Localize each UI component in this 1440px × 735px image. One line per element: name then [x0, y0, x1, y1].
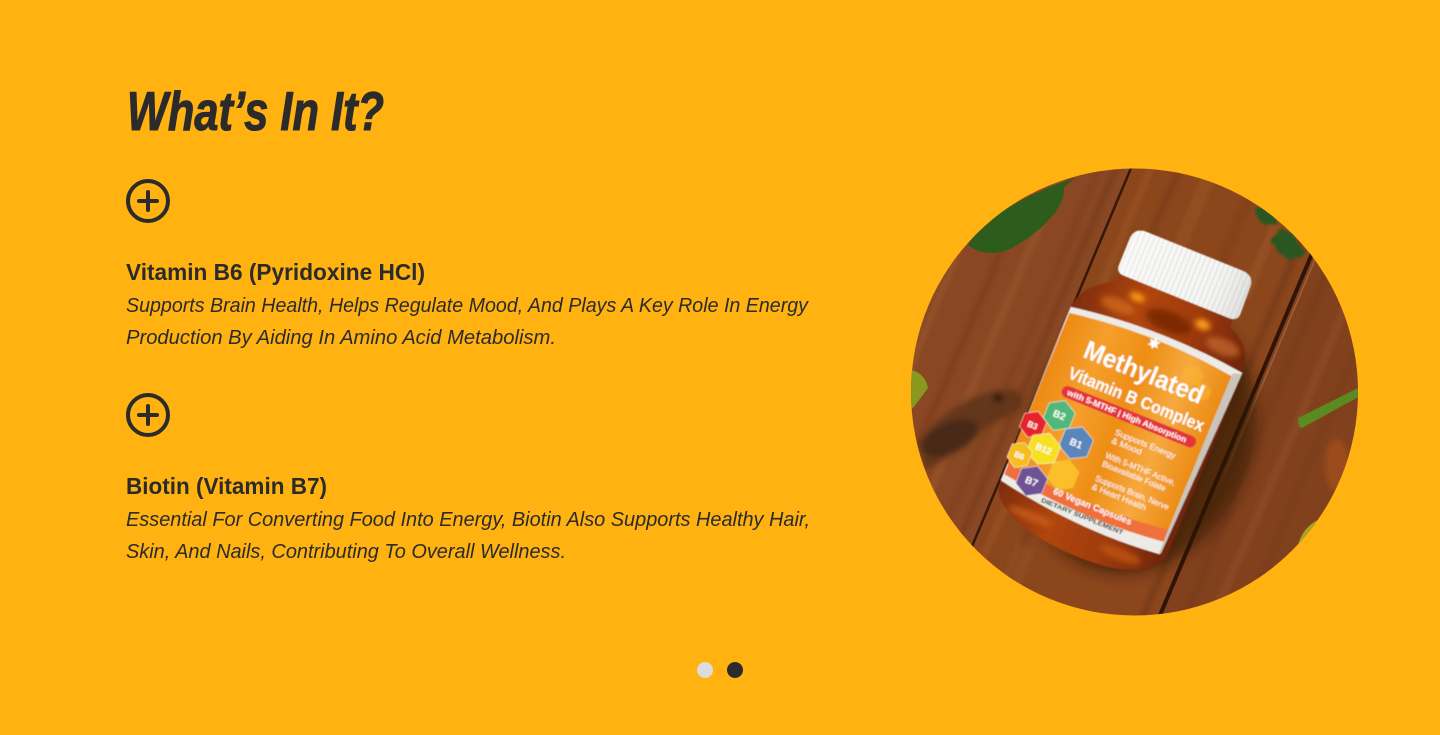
benefits list: Supports Brain, Nerve — [1094, 474, 1171, 512]
wood planks — [911, 168, 1358, 616]
vitamin hexagons: B6 — [1013, 450, 1026, 462]
capsule count: 60 Vegan Capsules — [1052, 486, 1133, 527]
glass body — [998, 273, 1245, 570]
title: What’s In It? — [127, 80, 384, 142]
benefits list: Bioavailable Folate — [1101, 459, 1168, 494]
vitamin hexagons: B7 — [1023, 475, 1040, 490]
label — [993, 298, 1244, 560]
carousel dots — [697, 662, 743, 678]
icon: plus in circle 1 — [128, 181, 168, 221]
red band — [1001, 463, 1169, 546]
side panel strip — [1159, 370, 1242, 557]
benefits list — [1090, 428, 1177, 512]
bottle shadow — [998, 230, 1262, 581]
red pill: with 5-MTHF | High Absorption — [1065, 387, 1188, 445]
vitamin hexagons: B2 — [1051, 408, 1067, 424]
benefits list: With 5-MTHF Active, — [1104, 451, 1177, 488]
cap — [1116, 227, 1256, 321]
description: Biotin: Essential For Converting Food Into Energy, Biotin Also Supports Healthy Hair, — [126, 509, 810, 531]
heading: Vitamin B6: Vitamin B6 (Pyridoxine HCl) — [126, 259, 425, 285]
ingredient: Biotin — [126, 473, 810, 563]
description: Vitamin B6: Production By Aiding In Amino Acid Metabolism. — [126, 327, 556, 349]
dietary supplement: DIETARY SUPPLEMENT — [1040, 497, 1124, 537]
vitamin hexagons: B12 — [1034, 441, 1053, 457]
plank seams — [971, 168, 1132, 547]
vitamin hexagons: B1 — [1068, 437, 1084, 452]
description: Biotin — [126, 509, 810, 563]
product photo in circle — [911, 168, 1358, 616]
lime left — [911, 370, 928, 408]
label: Vitamin B Complex — [1065, 363, 1208, 436]
ingredient: Vitamin B6 — [126, 259, 809, 349]
benefits list: & Mood — [1110, 436, 1143, 457]
logo — [1146, 338, 1161, 350]
vitamin hexagons — [1006, 399, 1095, 498]
lime bottom right — [1298, 520, 1318, 544]
vitamin hexagons: B3 — [1026, 420, 1039, 432]
product title: Methylated — [1080, 334, 1209, 410]
warm reflection — [1325, 439, 1349, 491]
description: Biotin: Skin, And Nails, Contributing To Overall Wellness. — [126, 541, 566, 563]
description: Vitamin B6: Supports Brain Health, Helps Regulate Mood, And Plays A Key Role In Energy — [126, 295, 809, 317]
honeycomb pale — [1184, 366, 1212, 400]
wood knot — [916, 390, 1022, 470]
celery stick — [1298, 387, 1360, 428]
benefits list: Supports Energy — [1113, 428, 1177, 461]
benefits list: & Heart Health — [1090, 482, 1147, 512]
kale — [1255, 206, 1306, 261]
icon: plus in circle 2 — [128, 395, 168, 435]
spinach leaf — [968, 178, 1075, 253]
bottle — [998, 230, 1252, 570]
description: Vitamin B6 — [126, 295, 809, 349]
heading: Biotin: Biotin (Vitamin B7) — [126, 473, 327, 499]
